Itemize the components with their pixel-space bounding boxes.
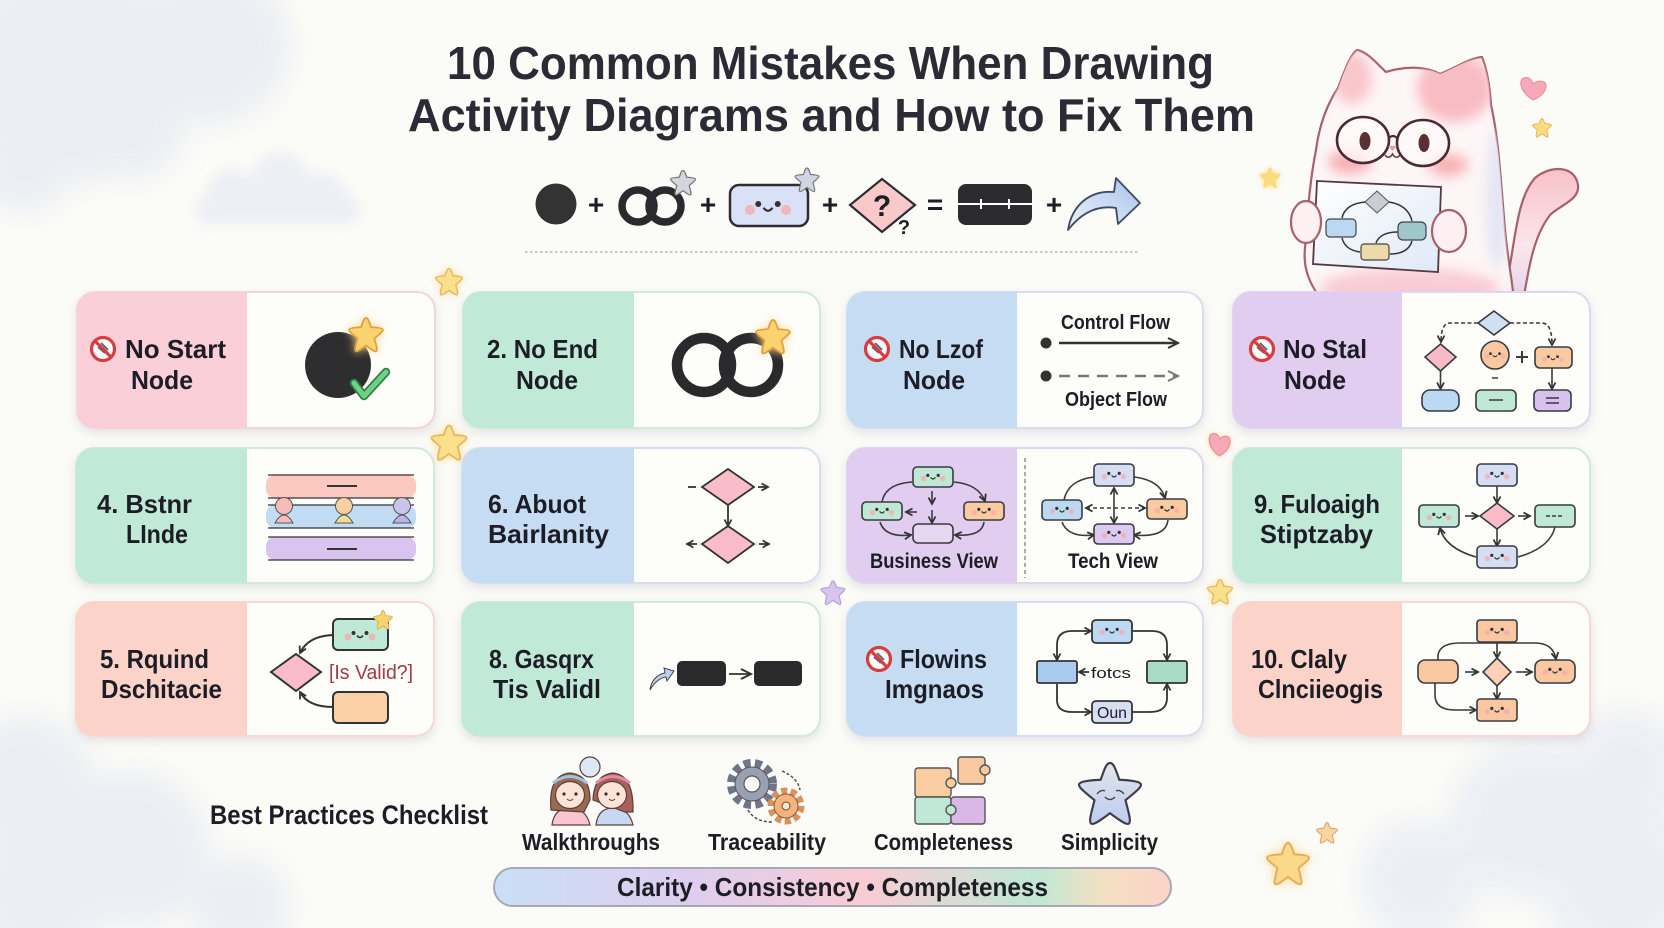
cloud: bottom left (0, 715, 290, 928)
icon: pink heart (1521, 77, 1546, 100)
business view diagram (862, 467, 1004, 543)
card label (1251, 644, 1383, 704)
icon: completeness puzzle (915, 757, 990, 824)
card label (1283, 334, 1367, 395)
card label: 8. Gasqrx (489, 644, 594, 674)
icon: start node with star and check (305, 318, 386, 398)
card label: Dschitacie (101, 674, 222, 704)
card label: Stiptzaby (1260, 519, 1374, 549)
card label: Bairlanity (488, 519, 610, 549)
card label: Node (903, 365, 965, 395)
text: simplicity: Simplicity (1061, 829, 1158, 855)
flow types diagram: Object Flow (1065, 389, 1167, 411)
card label (885, 644, 987, 704)
cat body (1305, 50, 1514, 300)
equation of activity diagram symbols (536, 168, 1140, 239)
plus: + (588, 189, 604, 220)
panel: card 7 (847, 448, 1203, 583)
icon: prohibition (866, 338, 888, 360)
cloud: top left (0, 0, 290, 213)
tech view diagram (1042, 464, 1187, 544)
card label (100, 644, 222, 704)
text: traceability: Traceability (708, 829, 826, 855)
cat mascot (1291, 50, 1578, 308)
card label (487, 334, 598, 395)
text: walkthroughs: Walkthroughs (522, 829, 660, 855)
icon: prohibition (92, 338, 114, 360)
icon: star near heart (1532, 118, 1552, 137)
card label: 2. No End (487, 334, 598, 364)
icon: end node rings (677, 320, 790, 392)
branching diagram (1422, 311, 1572, 411)
icon: action node (730, 185, 808, 226)
icon: prohibition (868, 648, 890, 670)
panel: card 9 (76, 602, 434, 736)
card label: 4. Bstnr (97, 489, 192, 519)
icon: grey star (670, 170, 696, 195)
flow diagram (1418, 620, 1575, 721)
flow diagram (1419, 464, 1575, 568)
card label: 6. Abuot (488, 489, 586, 519)
text: completeness: Completeness (874, 829, 1013, 855)
text: is valid guard: [Is Valid?] (329, 662, 413, 684)
icon: star (432, 426, 466, 460)
text: node labels: Oun (1097, 705, 1127, 722)
icon: end node rings (622, 190, 681, 222)
held diagram sheet (1313, 181, 1441, 272)
card label (97, 489, 192, 549)
text: tech view: Tech View (1068, 550, 1159, 573)
heading: best practices: Best Practices Checklist (210, 800, 488, 830)
panel: card 11 (847, 602, 1203, 736)
card label (488, 489, 610, 549)
card label (125, 334, 226, 395)
cloud: bottom right (1360, 710, 1664, 928)
title (408, 37, 1255, 141)
card label: Flowins (900, 644, 987, 674)
icon: prohibition (1250, 338, 1274, 360)
card label: No Lzof (899, 334, 983, 364)
loop diagram (1037, 620, 1187, 723)
card label (489, 644, 601, 704)
text: business view: Business View (870, 550, 999, 573)
decision diamonds diagram (687, 469, 769, 563)
card label: Node (516, 365, 578, 395)
guard condition diagram (271, 610, 392, 723)
icon: walkthroughs people (551, 757, 633, 825)
card label: Clnciieogis (1258, 674, 1383, 704)
icon: decision diamond: ? (898, 217, 910, 239)
icon: simplicity star (1079, 763, 1141, 824)
card label: LInde (126, 519, 188, 549)
cat glasses and face (1337, 117, 1449, 166)
icon: heart (1209, 433, 1230, 456)
cat tail (1505, 169, 1578, 296)
cloud: small (195, 152, 360, 225)
panel: card 10 (462, 602, 820, 736)
icon: traceability gears (731, 763, 801, 822)
banner: clarity consistency completeness (494, 868, 1171, 906)
cat markings (1320, 52, 1508, 308)
icon: start node (536, 184, 576, 224)
title: Activity Diagrams and How to Fix Them (408, 89, 1255, 141)
card label: No Stal (1283, 334, 1367, 364)
flow types diagram (1040, 312, 1178, 411)
panel: card 12 (1233, 602, 1590, 736)
card label: Node (131, 365, 193, 395)
card label: 5. Rquind (100, 644, 209, 674)
icon: small star (1316, 822, 1338, 843)
black action nodes (650, 661, 802, 690)
icon: star (1208, 580, 1232, 604)
card label: 9. Fuloaigh (1254, 489, 1380, 519)
icon: grey star (795, 168, 819, 192)
icon: large star (1267, 843, 1309, 884)
icon: fork bar (958, 184, 1032, 225)
card label: 10. Claly (1251, 644, 1347, 674)
panel: card 8 (1233, 448, 1590, 583)
icon: decision diamond: ? (873, 190, 891, 223)
text: node labels (1091, 665, 1131, 722)
card label: No Start (125, 334, 226, 364)
icon: decision diamond (850, 179, 915, 239)
flow types diagram: Control Flow (1061, 312, 1170, 334)
banner: clarity consistency completeness: Clarity • Consistency • Completeness (617, 872, 1048, 902)
equals: = (927, 189, 943, 220)
panel: card 3 (847, 292, 1203, 428)
card label (1254, 489, 1380, 549)
icon: star (436, 268, 462, 295)
plus: + (822, 189, 838, 220)
icon: purple star (821, 581, 845, 605)
panel: card 6 (462, 448, 820, 583)
title: 10 Common Mistakes When Drawing (447, 37, 1214, 89)
panel: card 1 (77, 292, 435, 428)
card label: Imgnaos (885, 674, 984, 704)
plus: + (700, 189, 716, 220)
card label: Node (1284, 365, 1346, 395)
text: node labels: fotcs (1091, 665, 1131, 682)
panel: card 5 (76, 448, 434, 583)
panel: card 2 (463, 292, 820, 428)
cat paws (1291, 201, 1466, 252)
panel: card 4 (1233, 292, 1590, 428)
swimlanes diagram (266, 475, 416, 560)
card label (899, 334, 983, 395)
card label: Tis Validl (493, 674, 601, 704)
icon: star near cat (1260, 168, 1280, 188)
plus: + (1046, 189, 1062, 220)
icon: curved arrow (1068, 178, 1140, 230)
